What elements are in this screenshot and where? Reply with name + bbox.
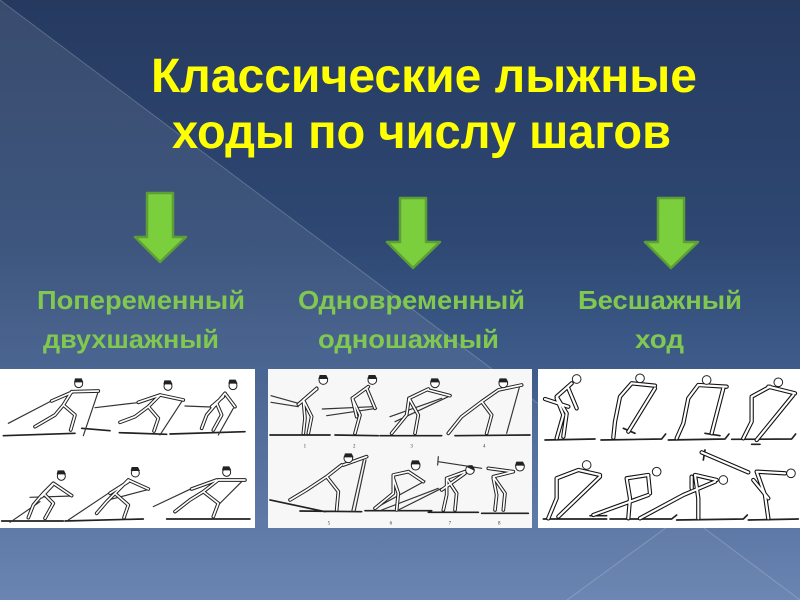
icon: arrow down left bbox=[135, 193, 186, 262]
skier 4: 4 bbox=[483, 445, 486, 450]
skier 6 bbox=[153, 466, 250, 519]
icon: arrow down middle bbox=[387, 198, 440, 268]
title bbox=[151, 50, 697, 159]
label: simultaneous one-step bbox=[298, 285, 525, 354]
skier 7 bbox=[398, 457, 482, 526]
skier 7 bbox=[640, 475, 747, 520]
skier 4 bbox=[732, 378, 796, 444]
skier 8: 8 bbox=[498, 521, 501, 526]
skier 3 bbox=[380, 378, 450, 450]
panel: stepless technique drawing bbox=[538, 369, 800, 528]
label: simultaneous one-step: одношажный bbox=[318, 324, 499, 354]
skier 1 bbox=[545, 375, 595, 440]
skier 8 bbox=[482, 462, 528, 526]
skier 1: 1 bbox=[304, 445, 307, 450]
skier 8 bbox=[702, 450, 798, 520]
skier 2: 2 bbox=[353, 445, 356, 450]
skier 6 bbox=[365, 460, 438, 526]
skier 2 bbox=[322, 375, 378, 450]
skier 5 bbox=[543, 461, 607, 519]
skier 4 bbox=[448, 378, 530, 450]
label: stepless bbox=[578, 285, 742, 354]
skier 5: 5 bbox=[328, 521, 331, 526]
label: alternating two-step bbox=[37, 285, 245, 354]
skier 6 bbox=[590, 467, 677, 519]
skier 6: 6 bbox=[390, 521, 393, 526]
label: stepless: Бесшажный bbox=[578, 285, 742, 315]
label: alternating two-step: Попеременный bbox=[37, 285, 245, 315]
skier 4 bbox=[2, 470, 72, 522]
skier 1 bbox=[270, 375, 330, 450]
skier 2 bbox=[95, 380, 183, 435]
label: stepless: ход bbox=[635, 324, 685, 354]
skier 5 bbox=[270, 453, 367, 526]
skier 7: 7 bbox=[449, 521, 452, 526]
icon: arrow down right bbox=[645, 198, 698, 268]
skier 2 bbox=[601, 374, 666, 440]
skier 1 bbox=[3, 378, 110, 436]
label: alternating two-step: двухшажный bbox=[43, 324, 219, 354]
panel: simultaneous one-step technique drawing bbox=[268, 369, 532, 528]
skier 3 bbox=[668, 376, 729, 440]
label: simultaneous one-step: Одновременный bbox=[298, 285, 525, 315]
title: ходы по числу шагов bbox=[172, 106, 671, 159]
background facet: bottom triangle bbox=[567, 514, 800, 600]
title: Классические лыжные bbox=[151, 50, 697, 103]
panel: alternating two-step technique drawing bbox=[0, 369, 255, 528]
skier 3 bbox=[170, 380, 245, 435]
skier 3: 3 bbox=[410, 445, 413, 450]
skier 5 bbox=[65, 467, 148, 521]
